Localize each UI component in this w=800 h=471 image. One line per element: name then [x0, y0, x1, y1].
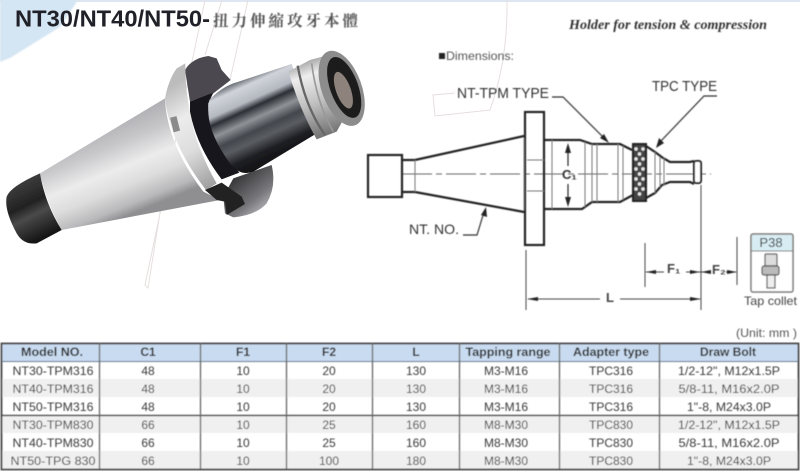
tap collet box: P38 — [759, 235, 783, 250]
drive slot — [205, 183, 245, 215]
header row: Model NO. — [21, 345, 83, 359]
row NT40-TPM316: 130 — [406, 382, 426, 396]
F1 and F2 dimensions — [645, 237, 737, 287]
row NT30-TPM830: 10 — [236, 418, 250, 432]
row NT30-TPM830: 66 — [141, 418, 155, 432]
row NT40-TPM830: 160 — [406, 436, 426, 450]
title: 扭力伸縮攻牙本體 — [213, 9, 361, 31]
row NT40-TPM316: 20 — [322, 382, 336, 396]
row NT30-TPM316: M3-M16 — [484, 364, 528, 378]
row NT40-TPM830: 10 — [236, 436, 250, 450]
label: NT number: NT. NO. — [409, 221, 459, 237]
row NT40-TPM316: 48 — [141, 382, 155, 396]
label: TPC type — [652, 78, 717, 148]
header row: Tapping range — [466, 345, 551, 359]
row NT40-TPM830: 66 — [141, 436, 155, 450]
unit note: (Unit: mm ) — [736, 326, 797, 340]
black flange ring — [190, 93, 239, 179]
collet mouth — [309, 45, 374, 132]
row NT30-TPM830: NT30-TPM830 — [12, 418, 94, 432]
row NT40-TPM316: TPC316 — [589, 382, 633, 396]
row NT30-TPM830: 1/2-12", M12x1.5P — [678, 418, 780, 432]
row NT50-TPM316: 130 — [406, 400, 426, 414]
row NT50-TPM316: M3-M16 — [484, 400, 528, 414]
label: NT-TPM type — [457, 85, 609, 143]
header row: Adapter type — [573, 345, 649, 359]
row NT30-TPM830: 25 — [322, 418, 336, 432]
row NT50-TPG 830 — [10, 454, 771, 468]
row NT50-TPM316: TPC316 — [589, 400, 633, 414]
row NT50-TPG 830: M8-M30 — [484, 454, 528, 468]
flange upper part — [185, 56, 231, 102]
L dimension: L — [606, 290, 614, 305]
row NT40-TPM830: M8-M30 — [484, 436, 528, 450]
row NT30-TPM316: 20 — [322, 364, 336, 378]
row NT50-TPM316: 1"-8, M24x3.0P — [687, 400, 771, 414]
label: TPC type: TPC TYPE — [652, 78, 717, 95]
silver collar ring — [165, 63, 217, 190]
row NT30-TPM830: TPC830 — [589, 418, 633, 432]
C1 dimension — [562, 143, 577, 207]
row NT30-TPM830 — [12, 418, 780, 432]
row NT30-TPM316: 10 — [236, 364, 250, 378]
row NT50-TPG 830: TPC830 — [589, 454, 633, 468]
cone shank — [40, 98, 220, 230]
row NT50-TPG 830: NT50-TPG 830 — [10, 454, 96, 468]
top background strip — [0, 0, 800, 2]
faint background lines — [145, 0, 507, 288]
title — [15, 6, 361, 32]
row NT40-TPM316: NT40-TPM316 — [12, 382, 94, 396]
row NT50-TPG 830: 100 — [319, 454, 339, 468]
header row: C1 — [140, 345, 156, 359]
row NT40-TPM830: NT40-TPM830 — [12, 436, 94, 450]
photo: tool holder — [6, 45, 374, 244]
title: NT30/NT40/NT50- — [15, 6, 210, 32]
flange lower part — [223, 165, 273, 217]
marking on ring — [170, 116, 180, 132]
TPC nose — [646, 146, 701, 198]
L dimension — [526, 185, 701, 310]
row NT40-TPM830: 5/8-11, M16x2.0P — [678, 436, 780, 450]
row NT50-TPM316 — [12, 400, 771, 414]
row NT40-TPM316: 10 — [236, 382, 250, 396]
C1 dimension: C₁ — [562, 167, 577, 182]
row NT30-TPM316: TPC316 — [589, 364, 633, 378]
row NT50-TPG 830: 10 — [236, 454, 250, 468]
subtitle: Holder for tension & compression — [568, 17, 767, 32]
silver front collar — [288, 55, 347, 139]
label: NT number — [409, 207, 487, 237]
dimensions heading: Dimensions: — [446, 49, 514, 63]
header row: Draw Bolt — [700, 345, 756, 359]
holder outline — [368, 112, 633, 245]
row NT40-TPM316 — [12, 382, 780, 396]
icon: tap collet — [762, 254, 779, 288]
F1 and F2 dimensions: F₁ — [667, 261, 680, 276]
black end nut — [6, 173, 62, 244]
table grid — [2, 343, 798, 470]
technical drawing — [368, 78, 737, 310]
row NT50-TPM316: 48 — [141, 400, 155, 414]
corner decoration — [0, 0, 78, 62]
row NT40-TPM830 — [12, 436, 780, 450]
label: NT-TPM type: NT-TPM TYPE — [457, 85, 549, 102]
header row — [21, 345, 756, 359]
row NT40-TPM316: M3-M16 — [484, 382, 528, 396]
dark cylinder body — [208, 64, 317, 173]
axis line — [402, 173, 711, 175]
F1 and F2 dimensions: F₂ — [712, 262, 726, 277]
row NT40-TPM830: 25 — [322, 436, 336, 450]
row NT50-TPG 830: 66 — [141, 454, 155, 468]
row NT50-TPG 830: 180 — [406, 454, 426, 468]
row NT30-TPM830: 160 — [406, 418, 426, 432]
knurled ring — [633, 144, 646, 201]
row NT30-TPM316: NT30-TPM316 — [12, 364, 94, 378]
row NT50-TPG 830: 1"-8, M24x3.0P — [687, 454, 771, 468]
row NT50-TPM316: 20 — [322, 400, 336, 414]
row NT40-TPM830: TPC830 — [589, 436, 633, 450]
row NT30-TPM830: M8-M30 — [484, 418, 528, 432]
row NT40-TPM316: 5/8-11, M16x2.0P — [678, 382, 780, 396]
row NT30-TPM316: 130 — [406, 364, 426, 378]
header row: L — [412, 345, 420, 359]
header row: F1 — [236, 345, 250, 359]
header row: F2 — [322, 345, 336, 359]
tap collet box: Tap collet — [744, 294, 798, 308]
row NT50-TPM316: NT50-TPM316 — [12, 400, 94, 414]
specification table — [2, 343, 798, 470]
tap collet box — [744, 234, 798, 308]
row shading — [2, 343, 798, 469]
row NT30-TPM316: 48 — [141, 364, 155, 378]
row NT50-TPM316: 10 — [236, 400, 250, 414]
row NT30-TPM316: 1/2-12", M12x1.5P — [678, 364, 780, 378]
row NT30-TPM316 — [12, 364, 780, 378]
